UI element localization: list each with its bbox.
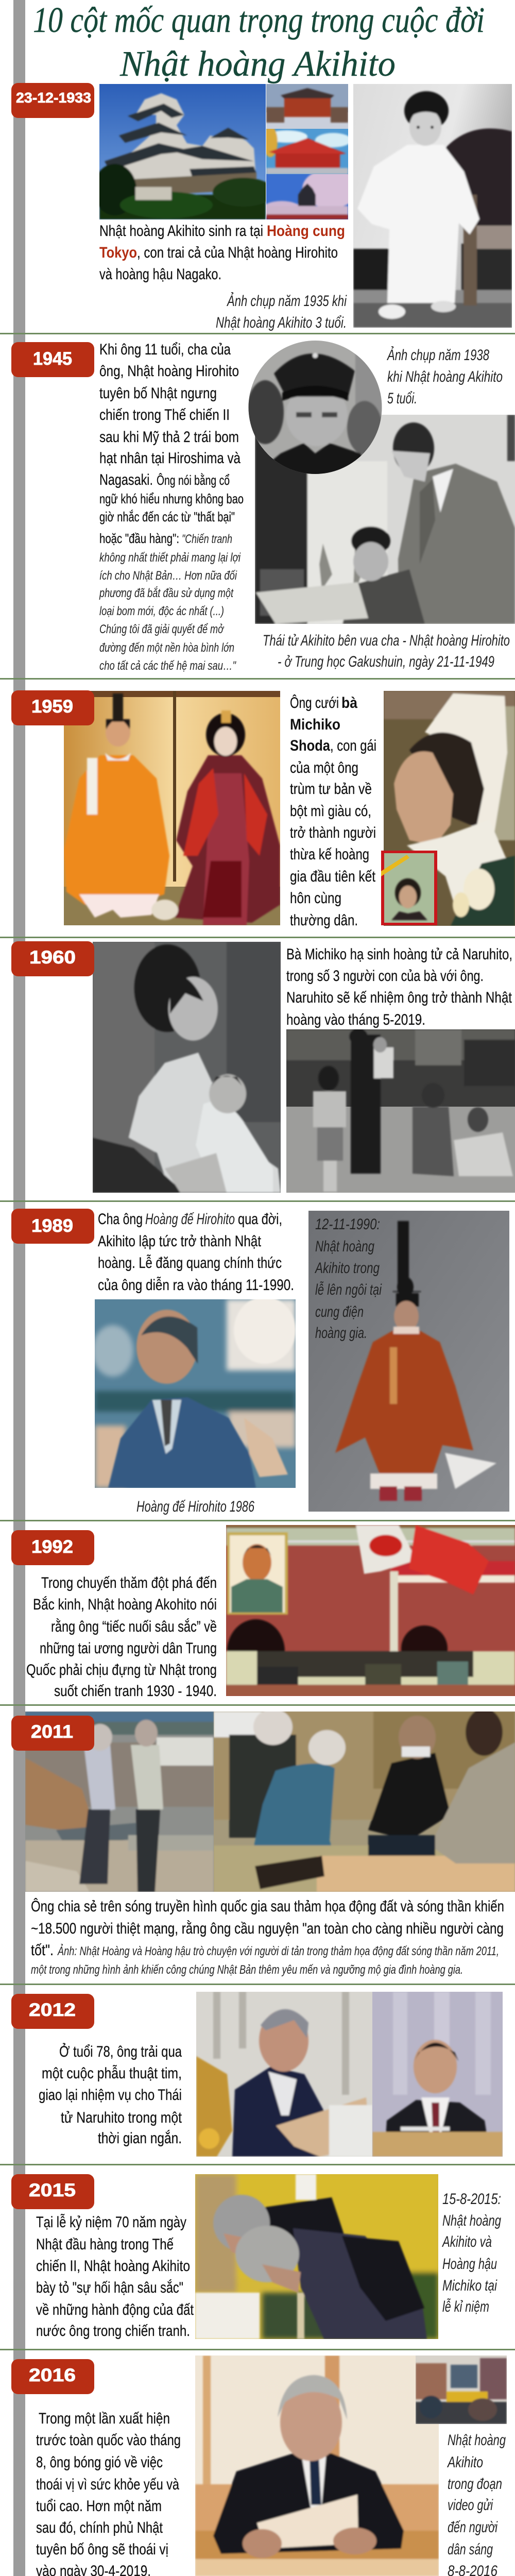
date badge 2015 xyxy=(11,2174,94,2209)
caption: 15-8-2015: 15-8-2015: xyxy=(442,2191,501,2208)
text: abdication: tuyên bố ông sẽ thoái vị xyxy=(36,2541,168,2558)
panel: 2011 xyxy=(11,1708,515,1977)
photo: Akihito video address xyxy=(195,2355,439,2576)
date badge 1933 xyxy=(11,83,94,118)
caption: photo 1935 xyxy=(216,292,347,331)
text: heart surgery: Ở tuổi 78, ông trải qua xyxy=(59,2043,182,2060)
text: accession: hoàng. Lễ đăng quang chính thức xyxy=(98,1255,282,1272)
text: abdication: trước toàn quốc vào tháng xyxy=(36,2432,181,2449)
text: accession: qua đời, xyxy=(238,1211,282,1228)
date badge 1933: 23-12-1933 xyxy=(16,90,91,106)
text: surrender announcement: tuyên bố Nhật ngưng xyxy=(99,385,217,402)
panel: 23-12-1933 xyxy=(11,83,512,331)
photo: castle xyxy=(99,84,266,219)
text: abdication: Trong một lần xuất hiện xyxy=(39,2410,170,2427)
panel: 1989 xyxy=(11,1209,509,1515)
caption: photo 1935: Nhật hoàng Akihito 3 tuổi. xyxy=(216,314,347,331)
text: accession: Cha ông xyxy=(98,1211,143,1228)
text: Beijing visit: rằng ông “tiếc nuối sâu sắc” về xyxy=(51,1618,217,1635)
photo: pagoda with cherry blossoms xyxy=(266,174,348,219)
text: Beijing visit xyxy=(26,1574,217,1700)
text: Naruhito birth: hoàng vào tháng 5-2019. xyxy=(286,1011,425,1028)
date badge 1989: 1989 xyxy=(31,1216,73,1236)
text: earthquake statement: tốt". xyxy=(31,1942,54,1959)
text: heart surgery xyxy=(39,2043,182,2147)
photo: Akihito as a child xyxy=(353,84,512,328)
date badge 1945: 1945 xyxy=(33,349,72,369)
photo: TIME cover xyxy=(381,851,437,925)
photo: Tiananmen with flags xyxy=(226,1525,515,1696)
caption: photo 1935: Ảnh chụp năm 1935 khi xyxy=(227,292,347,310)
text: marriage: bột mì giàu có, xyxy=(290,803,371,820)
text: marriage: Shoda xyxy=(290,737,330,754)
caption: Akihito and Hirohito xyxy=(263,632,510,670)
panel: 1960 xyxy=(11,941,515,1193)
caption: video address: video gửi xyxy=(448,2497,493,2514)
text: birth: Hoàng cung xyxy=(267,223,345,240)
text: surrender announcement: Nagasaki. xyxy=(99,471,153,488)
date badge 1992: 1992 xyxy=(31,1537,73,1557)
photo: couple talking with evacuees xyxy=(214,1711,515,1892)
text: abdication: thoái vị vì sức khỏe yếu và xyxy=(36,2476,179,2493)
text: heart surgery: thời gian ngắn. xyxy=(98,2130,182,2147)
text: surrender announcement: không nhất thiết phải mang lại lợi xyxy=(99,551,241,565)
text: surrender announcement: Khi ông 11 tuổi, cha của xyxy=(99,341,231,358)
text: accession: của ông diễn ra vào tháng 11-1990. xyxy=(98,1277,294,1294)
caption: 15-8-2015: lễ kỉ niệm xyxy=(442,2298,489,2315)
text: surrender announcement: hạt nhân tại Hiroshima và xyxy=(99,450,241,467)
text: heart surgery: tử Naruhito trong một xyxy=(61,2109,182,2126)
caption: 15-8-2015: Akihito và xyxy=(442,2233,492,2250)
text: accession: Hoàng đế Hirohito xyxy=(145,1211,235,1228)
date badge 1960 xyxy=(11,941,94,976)
date badge 1959 xyxy=(11,690,94,725)
text: abdication: sau đó, chính phủ Nhật xyxy=(36,2519,163,2536)
photo: red temple gate xyxy=(266,84,348,129)
text: abdication xyxy=(36,2410,181,2576)
text: surrender announcement: "Chiến tranh xyxy=(182,532,232,546)
photo: red temple and autumn sky xyxy=(266,129,348,174)
panel: 2016 xyxy=(11,2355,507,2576)
text: Naruhito birth xyxy=(286,946,512,1028)
text: surrender announcement: ngữ khó hiểu nhưng không bao xyxy=(99,491,244,506)
photo: Akihito cadet portrait xyxy=(247,340,382,477)
text: marriage: hôn cùng xyxy=(290,890,341,907)
text: birth: , con trai cả của Nhật hoàng Hirohito xyxy=(137,244,338,261)
caption: photo 1938 xyxy=(387,346,503,407)
caption: enthronement: lễ lên ngôi tại xyxy=(315,1281,382,1298)
text: marriage: , con gái xyxy=(330,737,376,754)
text: abdication: 8, ông bóng gió về việc xyxy=(36,2454,163,2471)
text: surrender announcement: ông, Nhật hoàng Hirohito xyxy=(99,363,239,380)
text: 70th anniversary: nước ông trong chiến tranh. xyxy=(36,2323,190,2340)
caption: 15-8-2015: Michiko tại xyxy=(442,2277,497,2294)
text: surrender announcement: phương đã bắt đầu sử dụng một xyxy=(99,586,234,600)
text: birth: Tokyo xyxy=(99,244,137,261)
date badge 2012 xyxy=(11,1994,94,2029)
text: marriage: thừa kế hoàng xyxy=(290,846,369,863)
caption: enthronement: Akihito trong xyxy=(315,1260,380,1277)
text: 70th anniversary: Tại lễ kỷ niệm 70 năm ngày xyxy=(36,2214,186,2231)
text: marriage: trở thành người xyxy=(290,824,376,841)
date badge 1959: 1959 xyxy=(31,697,73,717)
date badge 1960: 1960 xyxy=(29,947,76,968)
text: 70th anniversary: chiến II, Nhật hoàng Akihito xyxy=(36,2258,190,2275)
text: surrender announcement: loại bom mới, độc ác nhất (...) xyxy=(99,604,224,618)
text: abdication: tuổi cao. Hơn một năm xyxy=(36,2498,162,2515)
text: 70th anniversary: Nhật đầu hàng trong Thế xyxy=(36,2236,174,2253)
text: surrender announcement: Ông nói bằng cổ xyxy=(157,472,230,488)
text: surrender announcement xyxy=(99,341,244,673)
title xyxy=(33,1,485,84)
text: birth: Nhật hoàng Akihito sinh ra tại xyxy=(99,223,263,240)
text: surrender announcement: ích cho Nhật Bản… Hơn nữa đối xyxy=(99,569,237,583)
photo: couple amid tsunami debris xyxy=(25,1711,214,1892)
text: surrender announcement: giờ nhắc đến các từ "thất bại" xyxy=(99,509,235,524)
caption: video address xyxy=(447,2432,506,2576)
photo: Michiko with newborn xyxy=(93,942,281,1193)
text: accession xyxy=(98,1211,294,1294)
date badge 2011: 2011 xyxy=(31,1722,73,1742)
photo: Naruhito xyxy=(372,1992,503,2157)
text: 70th anniversary: về những hành động của đất xyxy=(36,2301,194,2318)
panel: 1945 xyxy=(11,340,515,673)
text: heart surgery: một cuộc phẫu thuật tim, xyxy=(42,2065,182,2082)
text: marriage: Ông cưới xyxy=(290,694,339,711)
text: marriage: trùm tư bản về xyxy=(290,781,372,798)
text: marriage xyxy=(290,694,376,929)
photo: Akihito enthronement xyxy=(308,1211,509,1512)
text: Beijing visit: Quốc phải chịu đựng từ Nhật trong xyxy=(26,1662,217,1679)
photo: couple bowing xyxy=(195,2174,438,2339)
caption: photo 1938: 5 tuổi. xyxy=(387,390,417,407)
text: earthquake statement xyxy=(31,1897,504,1977)
date badge 2016: 2016 xyxy=(29,2365,76,2385)
date badge 2011 xyxy=(11,1716,94,1751)
text: Beijing visit: những tai ương người dân Trung xyxy=(40,1640,217,1657)
photo: wedding portrait xyxy=(64,691,280,925)
caption: enthronement: Nhật hoàng xyxy=(315,1238,374,1255)
text: Beijing visit: suốt chiến tranh 1930 - 1940. xyxy=(54,1683,217,1700)
text: Beijing visit: Bắc kinh, Nhật hoàng Akohito nói xyxy=(33,1596,217,1613)
date badge 2016 xyxy=(11,2359,94,2394)
text: birth xyxy=(99,223,345,283)
caption: enthronement xyxy=(315,1216,382,1342)
text: surrender announcement: Chúng tôi đã giải quyết để mở xyxy=(99,622,225,636)
text: marriage: của một ông xyxy=(290,759,358,776)
text: surrender announcement: chiến trong Thế chiến II xyxy=(99,406,230,423)
photo: crowd watching big screen xyxy=(416,2355,507,2424)
caption: video address: Akihito xyxy=(447,2454,483,2471)
text: marriage: Michiko xyxy=(290,716,340,733)
caption: enthronement: hoàng gia. xyxy=(315,1325,367,1342)
caption: enthronement: 12-11-1990: xyxy=(315,1216,380,1233)
panel: 1959 xyxy=(11,690,515,929)
date badge 2012: 2012 xyxy=(29,2000,76,2020)
caption: enthronement: cung điện xyxy=(315,1303,364,1320)
text: marriage: gia đầu tiên kết xyxy=(290,868,376,885)
panel: 2015 xyxy=(11,2174,501,2340)
caption: video address: dân sáng xyxy=(448,2541,493,2558)
text: accession: Akihito lập tức trở thành Nhật xyxy=(98,1233,262,1250)
title: Nhật hoàng Akihito xyxy=(119,44,396,84)
photo: Akihito reading xyxy=(196,1992,372,2157)
date badge 1945 xyxy=(11,342,94,377)
text: Beijing visit: Trong chuyến thăm đột phá đến xyxy=(41,1574,217,1591)
text: surrender announcement: đường đến một nền hòa bình lớn xyxy=(99,641,234,655)
caption: 15-8-2015 xyxy=(442,2191,501,2315)
date badge 1992 xyxy=(11,1530,94,1565)
photo: Hirohito 1986 xyxy=(95,1299,296,1488)
text: marriage: bà xyxy=(341,694,357,711)
text: surrender announcement: hoặc "đầu hàng": xyxy=(99,531,179,546)
date badge 1989 xyxy=(11,1209,94,1244)
date badge 2015: 2015 xyxy=(29,2180,76,2200)
text: marriage: thường dân. xyxy=(290,912,358,929)
panel: 2012 xyxy=(11,1992,503,2157)
photo: Akihito with Hirohito xyxy=(255,415,515,624)
panel: 1992 xyxy=(11,1525,515,1700)
caption: Hirohito 1986: Hoàng đế Hirohito 1986 xyxy=(136,1498,254,1515)
photo: royal family on lawn xyxy=(286,1029,515,1193)
text: birth: và hoàng hậu Nagako. xyxy=(99,266,221,283)
text: surrender announcement: cho tất cả các thế hệ mai sau…" xyxy=(99,659,236,673)
text: 70th anniversary: bày tỏ "sự hối hận sâu sắc" xyxy=(36,2279,183,2296)
text: heart surgery: giao lại nhiệm vụ cho Thái xyxy=(39,2087,182,2104)
text: surrender announcement: sau khi Mỹ thả 2 trái bom xyxy=(99,429,239,446)
text: 70th anniversary xyxy=(36,2214,194,2340)
photo: Michiko portrait xyxy=(384,691,515,926)
